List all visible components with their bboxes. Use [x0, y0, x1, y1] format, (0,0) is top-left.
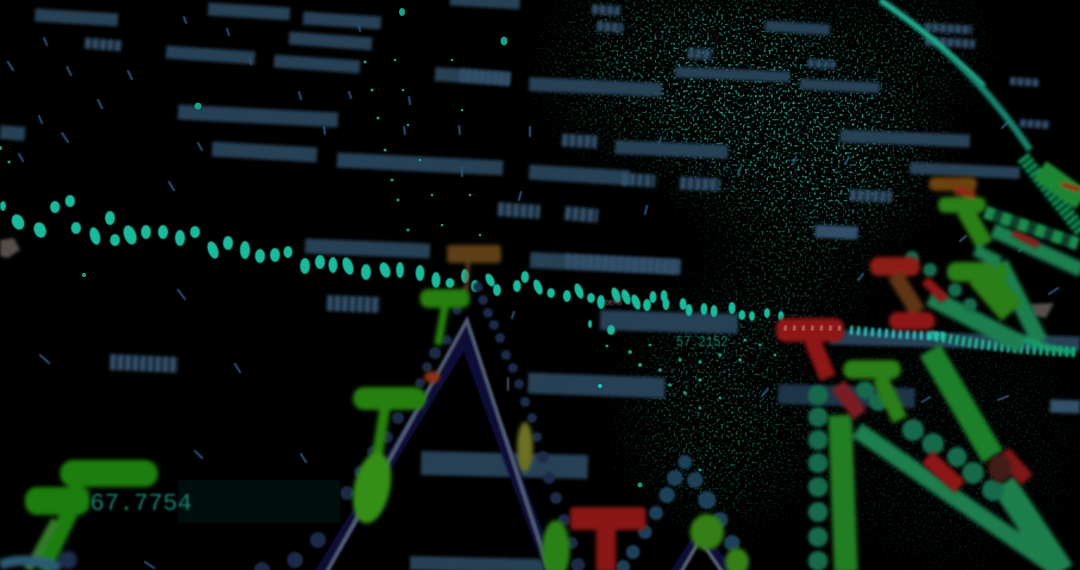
grey markers — [0, 238, 1054, 318]
value label: 57.2152: 57.2152 — [676, 334, 728, 351]
right particle stream — [850, 330, 1078, 352]
red label — [570, 507, 646, 570]
sparse upper dots — [0, 8, 508, 503]
particle cloud — [480, 0, 1080, 570]
data label digit blobs — [85, 9, 1080, 407]
green middle label — [347, 387, 426, 527]
green second peak markers — [690, 514, 724, 550]
wave of teal data dots — [0, 195, 784, 335]
right chart: green labels — [843, 177, 1012, 420]
right chart: top corner bright series — [1023, 157, 1080, 232]
value bubbles on mid chart — [347, 245, 749, 570]
bead trail: first peak — [254, 282, 585, 570]
right chart: thick lines — [840, 230, 1080, 570]
olive marker — [517, 422, 533, 472]
mid chart peak lines — [320, 320, 734, 570]
right chart: striped beads — [985, 212, 1078, 244]
right chart: beads — [808, 251, 1004, 570]
red stream overlay dots — [784, 326, 845, 330]
orange top label — [447, 245, 501, 295]
value label: 67.7754 — [90, 480, 340, 523]
value label: 67.7754: 67.7754 — [90, 491, 192, 518]
bottom-left chart — [0, 460, 158, 570]
curved bright arc — [880, 0, 1030, 150]
lower right scattered dots — [598, 338, 776, 498]
green top label — [420, 289, 470, 345]
bead trail: second peak — [616, 455, 745, 570]
small label: DEMO: DEMO — [605, 300, 622, 308]
orange marker — [424, 371, 440, 383]
right chart: red labels and stems — [776, 233, 1039, 487]
green bottom marker — [542, 520, 570, 570]
